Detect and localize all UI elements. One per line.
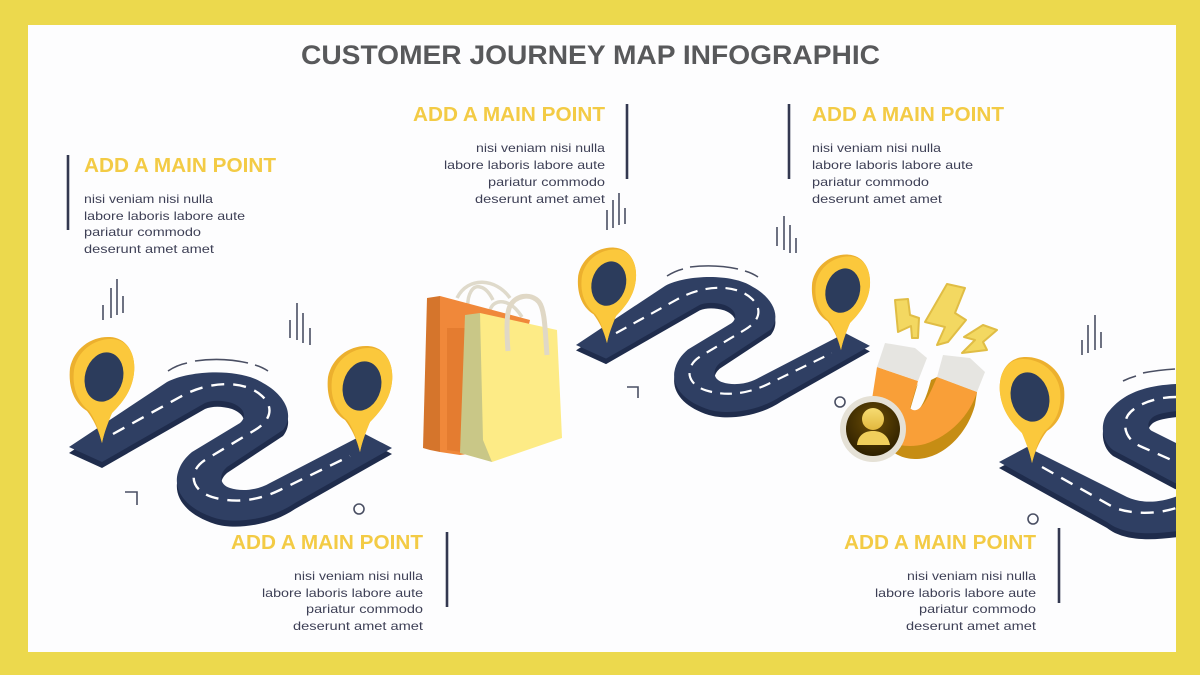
text block: main point 2: nisi veniam nisi nulla [476, 141, 605, 155]
text block: main point 2: deserunt amet amet [475, 192, 606, 206]
text block: main point 4: pariatur commodo [306, 602, 423, 616]
title: CUSTOMER JOURNEY MAP INFOGRAPHIC [301, 40, 880, 70]
shopping bags [423, 282, 562, 462]
text block: main point 2: ADD A MAIN POINT [413, 104, 605, 126]
magnet left tip [877, 343, 927, 381]
road 2 surface [576, 277, 870, 417]
text block: main point 5: pariatur commodo [919, 602, 1036, 616]
road 3 with pin [999, 315, 1176, 540]
pin 4 [812, 255, 870, 350]
road 3 surface [999, 384, 1176, 540]
pin 1 [70, 337, 134, 443]
text block: main point 4: nisi veniam nisi nulla [294, 569, 423, 583]
magnet orange body [868, 367, 977, 446]
text block: main point 1: nisi veniam nisi nulla [84, 192, 213, 206]
road 2 with pins [576, 193, 870, 417]
text block: main point 3 [789, 104, 1004, 206]
text block: main point 1: labore laboris labore aute [84, 209, 245, 223]
front bag handles [507, 296, 547, 355]
text block: main point 4: deserunt amet amet [293, 619, 424, 633]
road 1 decoration [103, 279, 364, 514]
road 2 decoration [607, 193, 845, 407]
text block: main point 3: ADD A MAIN POINT [812, 104, 1004, 126]
road 1 surface [69, 372, 392, 527]
text block: main point 3: labore laboris labore aute [812, 158, 973, 172]
customer avatar badge [840, 396, 906, 462]
text block: main point 4: labore laboris labore aute [262, 586, 423, 600]
text block: main point 3: nisi veniam nisi nulla [812, 141, 941, 155]
yellow bag front [480, 313, 562, 462]
pin 5 [1000, 357, 1064, 463]
text block: main point 5 [844, 528, 1059, 633]
orange bag [440, 296, 530, 455]
yellow bag side [460, 313, 492, 462]
text block: main point 5: labore laboris labore aute [875, 586, 1036, 600]
magnet body shadow [888, 377, 977, 459]
back bag handles [457, 282, 522, 317]
magnet right tip [937, 355, 985, 392]
road 1 with pins [69, 279, 392, 527]
pin 2 [328, 346, 392, 452]
text block: main point 4: ADD A MAIN POINT [231, 532, 423, 554]
text block: main point 4 [231, 532, 447, 633]
text block: main point 1: pariatur commodo [84, 225, 201, 239]
text block: main point 5: ADD A MAIN POINT [844, 532, 1036, 554]
lightning bolts [895, 284, 997, 353]
text block: main point 2 [413, 104, 627, 206]
pin 3 [578, 248, 636, 343]
text block: main point 2: pariatur commodo [488, 175, 605, 189]
text block: main point 5: deserunt amet amet [906, 619, 1037, 633]
text block: main point 1 [68, 155, 276, 256]
text block: main point 1: ADD A MAIN POINT [84, 155, 276, 177]
road 3 decoration [1028, 315, 1175, 524]
text block: main point 1: deserunt amet amet [84, 242, 215, 256]
text block: main point 2: labore laboris labore aute [444, 158, 605, 172]
text block: main point 5: nisi veniam nisi nulla [907, 569, 1036, 583]
magnet attracting customer [840, 284, 997, 462]
text block: main point 3: deserunt amet amet [812, 192, 943, 206]
text block: main point 3: pariatur commodo [812, 175, 929, 189]
